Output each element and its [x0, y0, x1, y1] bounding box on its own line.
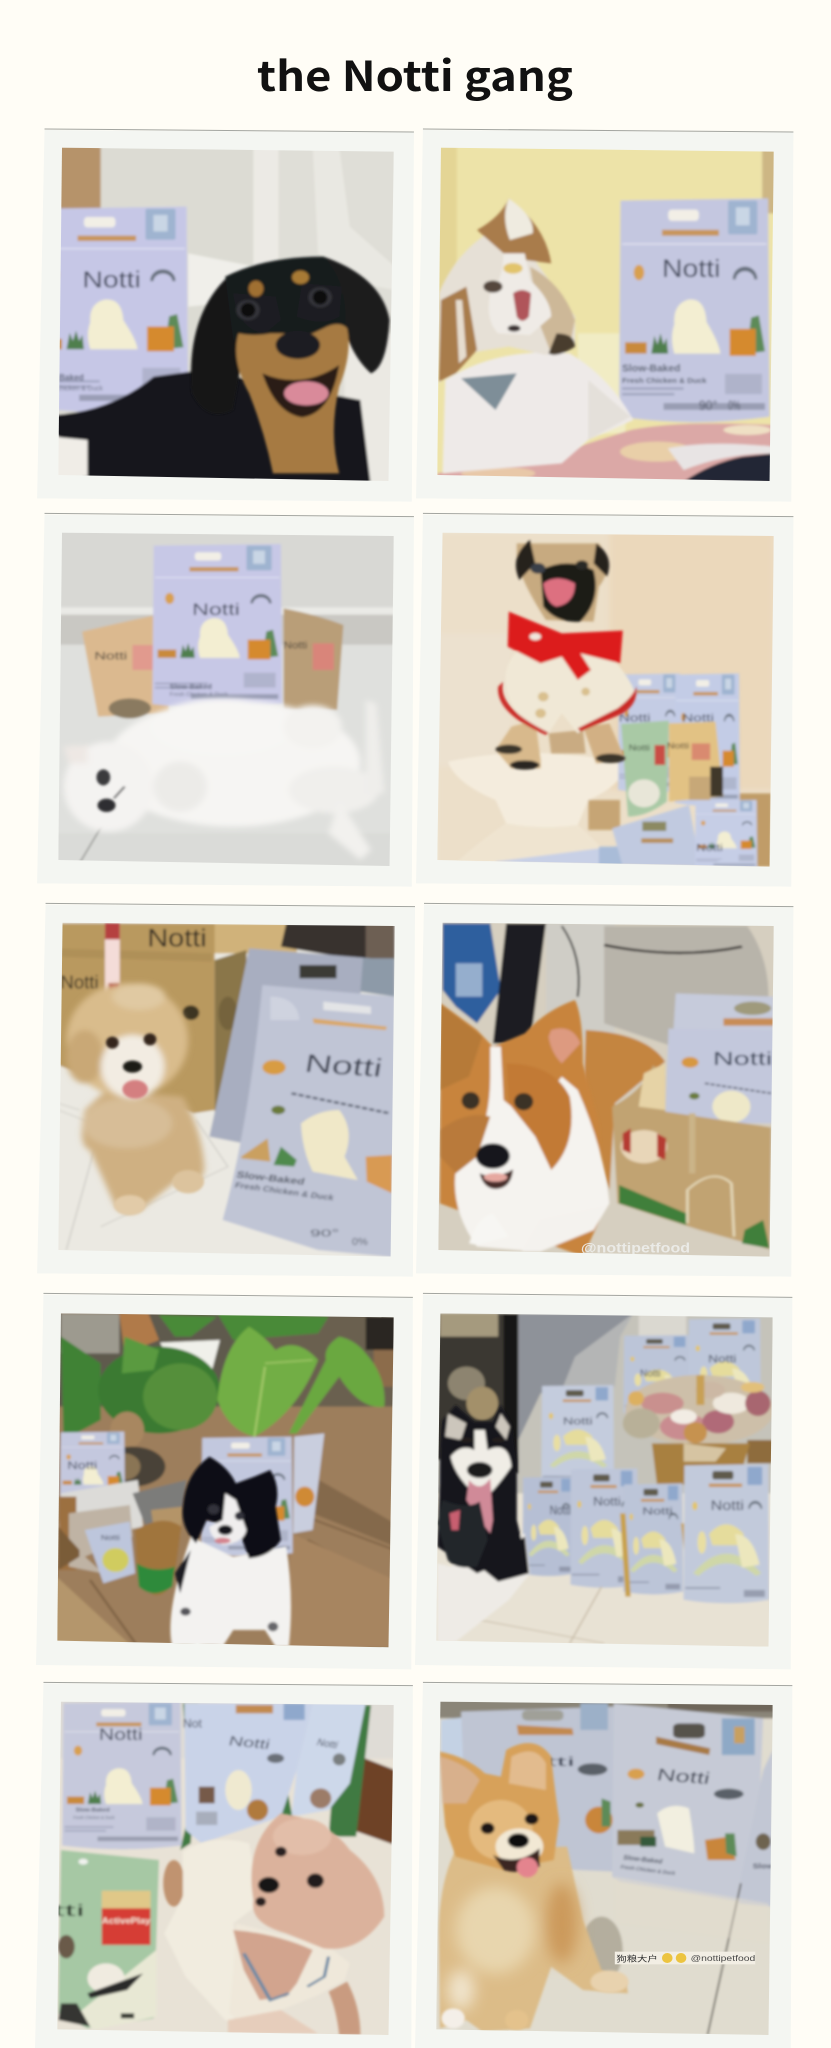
photo card: fluffy puppy: Fresh Chicken & Duck — [234, 1181, 335, 1203]
photo card: fluffy puppy: Slow-Baked — [235, 1169, 306, 1187]
photo card: shih tzu: 90° — [699, 399, 717, 413]
photo card: apricot poodle: Slow-Baked — [76, 1807, 110, 1814]
photo card: fluffy puppy: 0% — [352, 1236, 368, 1247]
photo card: apricot poodle: Fresh Chicken & Duck — [73, 1814, 115, 1820]
papillon — [170, 1457, 291, 1647]
dachshund head — [191, 257, 390, 473]
photo card: dachshund: Notti — [82, 268, 141, 293]
handle text: @nottipetfood — [581, 1240, 690, 1255]
photo card: apricot poodle: Not — [183, 1718, 202, 1730]
photo card: husky: Notti — [640, 1368, 661, 1380]
photo card: fluffy puppy: 90° — [310, 1228, 339, 1239]
photo card: husky: Notti — [708, 1353, 736, 1366]
photo card: black and white papillon: Notti — [67, 1461, 97, 1472]
photo card: pug with bow: Notti — [667, 742, 689, 751]
photo card: apricot poodle: Notti — [227, 1733, 272, 1752]
corgi — [440, 1000, 609, 1257]
photo card: apricot poodle — [35, 1682, 413, 2048]
photo card: corgi: Notti — [713, 1049, 772, 1070]
photo card: pomeranian: Slow-Baked — [622, 1853, 664, 1865]
photo card: dachshund — [33, 129, 414, 502]
photo card: apricot poodle: ActivePlay — [102, 1917, 151, 1926]
white spitz dog — [64, 698, 384, 860]
photo card: husky: Notti — [593, 1496, 621, 1509]
photo card: shih tzu: 0% — [728, 399, 740, 413]
photo card: fluffy puppy: Notti — [303, 1050, 384, 1083]
photo card: pug with bow: Notti — [629, 744, 650, 753]
photo card: white spitz — [37, 513, 414, 887]
fluffy puppy — [66, 983, 204, 1213]
shih tzu body — [439, 198, 633, 473]
photo card: pug with bow: Notti — [696, 843, 723, 853]
photo card: apricot poodle: Notti — [99, 1726, 143, 1745]
apricot poodle — [163, 1813, 384, 2035]
photo card: dachshund: Slow-Baked — [37, 372, 84, 383]
photo card: apricot poodle: tti — [53, 1901, 85, 1920]
photo card: white spitz: Notti — [192, 601, 240, 619]
pug — [496, 540, 636, 770]
photo card: husky — [415, 1293, 792, 1669]
photo card: pug with bow: Notti — [682, 711, 714, 724]
title: the Notti gang — [257, 43, 573, 103]
photo card: husky: Notti — [642, 1506, 673, 1517]
photo card: pomeranian — [415, 1682, 792, 2048]
husky — [437, 1405, 530, 1642]
photo card: fluffy puppy: Notti — [60, 973, 99, 993]
photo card: pug with bow: Notti — [619, 711, 651, 724]
photo card: dachshund: Fresh Chicken & Duck — [37, 385, 104, 393]
photo card: shih tzu: Notti — [662, 256, 720, 283]
photo card: husky: Notti — [711, 1498, 744, 1514]
caption sticker — [615, 1952, 755, 1964]
photo card: pomeranian: Fresh Chicken & Duck — [620, 1864, 676, 1876]
photo card: white spitz: Slow-Baked — [170, 684, 212, 691]
photo card: shih tzu: Fresh Chicken & Duck — [622, 377, 707, 385]
photo card: husky: Notti — [563, 1415, 593, 1427]
photo card: husky: Notti — [550, 1505, 571, 1518]
photo card: black and white papillon — [36, 1293, 413, 1669]
pomeranian — [439, 1847, 628, 2032]
photo card: shih tzu: Slow-Baked — [622, 362, 680, 374]
photo card: shih tzu — [416, 129, 793, 502]
caption sticker: 狗粮大户 — [616, 1954, 658, 1964]
photo card: white spitz: Notti — [284, 639, 307, 651]
photo card: white spitz: Notti — [94, 650, 127, 662]
photo card: corgi — [416, 903, 793, 1277]
photo card: fluffy puppy — [37, 903, 415, 1277]
photo card: pomeranian: Slow — [753, 1862, 774, 1871]
caption sticker: @nottipetfood — [691, 1954, 755, 1963]
photo card: pomeranian: Notti — [655, 1765, 712, 1788]
photo card: fluffy puppy: Notti — [147, 925, 207, 953]
photo card: black and white papillon: Notti — [101, 1534, 120, 1542]
photo card: pomeranian: tti — [546, 1754, 575, 1769]
photo card: white spitz: Fresh Chicken & Duck — [170, 691, 229, 698]
photo card: pug with bow — [416, 513, 793, 887]
photo card: apricot poodle: Notti — [315, 1736, 340, 1751]
